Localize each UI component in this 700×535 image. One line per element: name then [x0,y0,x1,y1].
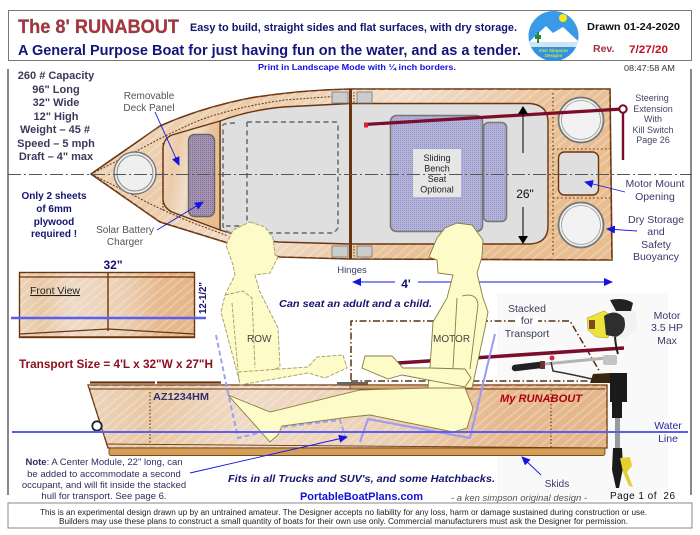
print note: Print in Landscape Mode with ¼ inch borders. [258,62,456,72]
plywood note: Only 2 sheets [21,191,87,202]
center module note: be added to accommodate a second [27,469,181,480]
tagline: Easy to build, straight sides and flat surfaces, with dry storage. [190,22,517,34]
seat frame [360,334,495,442]
operator leg and foot [228,388,473,442]
label: removable deck panel: Removable [124,91,175,102]
operator head and torso [428,223,488,388]
sliding bench seat: Sliding [423,153,451,163]
stacked hull outline [351,321,600,381]
title: The 8' RUNABOUT [18,16,179,38]
label: steering extension: Steering [635,93,669,103]
plan callouts [96,91,685,276]
propeller [620,457,633,487]
logo [528,11,579,62]
motor operator figure [228,223,488,442]
bow ring [92,421,102,431]
water line label: Line [658,433,678,445]
revision [593,43,668,56]
rower label: ROW [247,334,272,345]
specifications [17,70,95,163]
label: motor mount: Opening [635,191,675,203]
stacked label: Transport [505,328,549,340]
fit note: Fits in all Trucks and SUV's, and some Hatchbacks. [228,473,495,485]
front view: Front View [30,285,80,297]
header panel [8,10,692,62]
label: motor mount [626,178,685,203]
fore deck [163,121,220,230]
page frame side rules [7,69,692,495]
label: removable deck panel: Deck Panel [123,103,175,114]
center module note: Note: A Center Module, 22" long, can [25,457,183,468]
subtitle: A General Purpose Boat for just having fun on the water, and as a tender. [18,43,521,59]
logo: Ken Simpson [539,48,568,53]
motor label: Max [657,335,678,347]
transport size: Transport Size = 4'L x 32"W x 27"H [19,357,213,371]
boat name: My RUNABOUT [500,393,583,405]
specifications: Speed – 5 mph [17,138,95,150]
steering rod [398,348,624,363]
rower figure [221,222,347,385]
water line label [654,420,682,445]
plywood note [21,191,87,240]
plywood note: required ! [31,229,77,240]
motor label [651,310,683,347]
water line [12,431,688,433]
sliding bench seat: Bench [424,164,450,174]
skids label [522,457,569,490]
lower unit [612,448,623,488]
26 inch dimension: 26" [516,187,534,201]
top plan view of boat [91,89,627,260]
credit: - a ken simpson original design - [451,493,587,503]
label: motor mount: Motor Mount [626,178,685,190]
height label: 12-1/2" [197,282,209,314]
label: dry storage: and [647,226,665,238]
revision: 7/27/20 [629,44,668,56]
arrow: motor mount [585,182,625,192]
label: solar charger: Solar Battery [96,225,154,236]
front view water line [11,317,206,319]
front view [11,258,209,338]
32 inch width label: 32" [103,258,123,272]
timestamp: 08:47:58 AM [624,63,675,73]
center module note: hull for transport. See page 6. [41,491,167,502]
label: steering extension: Extension [633,104,673,114]
stern storage hatches [553,93,610,256]
label: steering extension: With [644,114,662,124]
label: steering extension: Page 26 [636,135,670,145]
center joint [349,89,354,259]
side view hull [88,382,607,456]
center module note: occupant, and will fit inside the stacked [22,480,186,491]
specifications: 96" Long [32,84,80,96]
engine [587,299,637,354]
specifications: Draft – 4" max [19,151,94,163]
revision: Rev. [593,43,614,55]
rower arm [238,355,347,385]
center seat deck [337,382,428,389]
stacked label: Stacked [508,303,546,315]
stacked label: for [521,315,534,327]
label: dry storage: Safety [641,239,672,251]
water line label: Water [654,420,682,432]
label: solar charger [96,225,154,248]
plywood note: plywood [34,217,74,228]
skids label: Skids [545,479,569,490]
disclaimer panel: This is an experimental design drawn up by an untrained amateur. The Designer accepts no liability for any loss, harm or damage sustained during construction or use. [40,508,647,517]
motor label: 3.5 HP [651,322,683,334]
4 foot dimension: 4' [401,277,411,291]
removable deck panel outline [223,122,338,233]
label: steering extension [632,93,674,145]
rower body [221,222,280,383]
front panel [20,272,194,338]
hinges [332,92,372,257]
cockpit floor [220,104,548,244]
plywood note: of 6mm [36,204,72,215]
skid [109,448,605,456]
label: dry storage: Buoyancy [633,251,680,263]
26 inch dimension [516,107,534,243]
page number: Page 1 of 26 [610,491,675,502]
tiller [515,355,617,379]
arrow: deck panel [155,112,179,165]
sliding bench seat: Optional [420,184,454,194]
disclaimer panel [8,503,692,528]
registration: AZ1234HM [153,392,209,403]
seating note: Can seat an adult and a child. [279,299,432,310]
operator label: MOTOR [433,334,470,345]
hull outline [91,89,612,260]
specifications: 32" Wide [33,97,79,109]
deck rails [90,381,221,384]
arrow: dry storage [607,229,637,231]
label: dry storage: Dry Storage [628,214,684,226]
label: solar charger: Charger [107,237,144,248]
specifications: 12" High [34,111,79,123]
motor background [497,293,668,500]
motor label: Motor [654,310,681,322]
specifications: 260 # Capacity [18,70,95,82]
logo: Designs [545,53,563,58]
center module note [22,457,186,502]
bow ring [114,152,156,194]
rear seat frame [216,335,347,442]
sliding bench seat: Seat [428,174,447,184]
station line [150,390,551,447]
label: steering extension: Kill Switch [632,125,674,135]
solar panel [188,134,214,216]
specifications: Weight – 45 # [20,124,90,136]
motor shaft [615,395,620,453]
label: dry storage [628,214,684,263]
operator arm and hand [362,356,471,387]
website: PortableBoatPlans.com [300,491,423,503]
arrow: solar charger [157,202,203,230]
label: removable deck panel [123,91,175,114]
sliding bench seat [390,116,506,232]
steering extension [364,105,627,160]
stacked label [505,303,549,340]
label: hinges: Hinges [337,265,367,276]
note arrow [190,437,347,473]
outboard motor [515,299,637,488]
disclaimer panel: Builders may use these plans to construct a small quantity of boats for their own use only. Commercial manufacturers must ask the Designer for permission. [59,517,628,526]
clamp bracket [590,373,627,418]
drawn date: Drawn 01-24-2020 [587,21,680,33]
center line [8,174,692,176]
